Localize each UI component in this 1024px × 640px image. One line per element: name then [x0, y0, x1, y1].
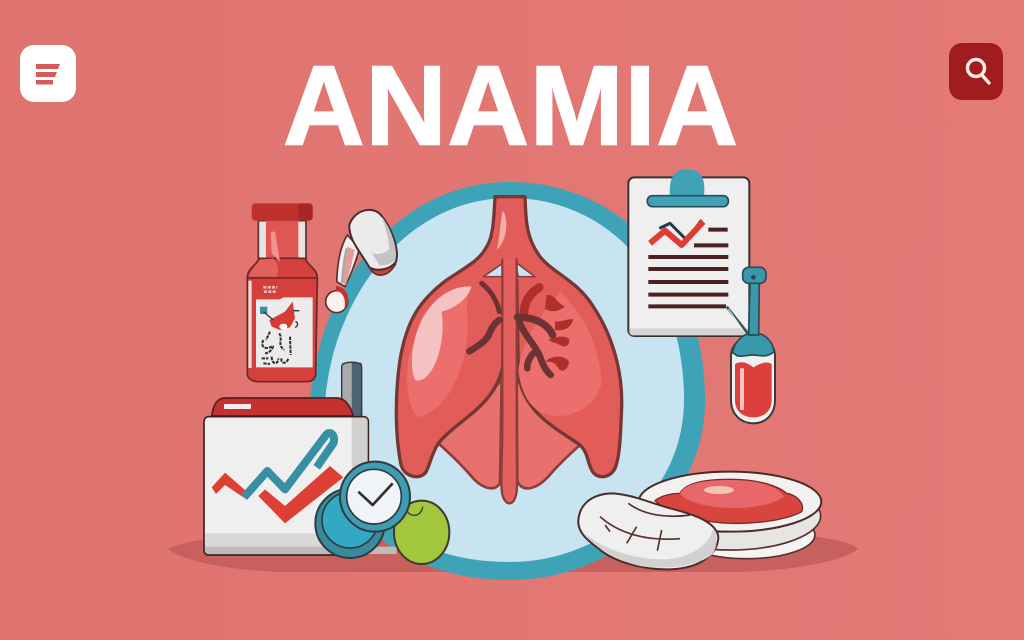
bottle cap	[252, 203, 313, 221]
clock badge	[340, 462, 410, 532]
apple	[394, 501, 449, 564]
blood	[735, 362, 772, 417]
trachea highlight	[497, 211, 506, 250]
background circle	[310, 182, 705, 580]
title: ANAMIA	[283, 42, 738, 168]
inhaler head	[369, 258, 396, 275]
top plate	[639, 472, 821, 532]
right red branches	[524, 287, 539, 313]
stethoscope badge and apple	[315, 462, 449, 564]
stitches	[600, 503, 690, 551]
ground shadow	[168, 534, 858, 572]
clip	[670, 169, 704, 196]
teal zigzag pen	[244, 433, 334, 497]
report text lines	[648, 230, 728, 306]
tube glass	[731, 335, 775, 423]
label art	[260, 307, 267, 314]
plates and pillow	[578, 472, 821, 569]
pillow	[578, 493, 718, 569]
tube stopper	[732, 333, 774, 356]
airway windows	[483, 262, 535, 277]
icon: search button	[949, 43, 1003, 100]
clipboard	[628, 169, 749, 336]
middle plate	[639, 482, 821, 550]
lighter right lobe area	[518, 292, 602, 416]
icon: menu button	[20, 45, 76, 102]
inhaler tube	[337, 235, 359, 287]
lower plate	[678, 511, 815, 559]
grey tube behind folder	[342, 362, 362, 420]
teal disc	[315, 489, 385, 558]
red zigzag	[212, 466, 343, 523]
inhaler ball	[326, 291, 348, 313]
blood test tube	[731, 267, 775, 423]
bottle label	[256, 297, 313, 367]
central bar	[501, 258, 517, 503]
label scribbles	[262, 332, 291, 364]
folder tab	[212, 398, 353, 416]
front lobes and trachea	[396, 197, 622, 477]
folder body	[204, 417, 368, 555]
bottle body	[247, 258, 317, 382]
report chart	[659, 220, 702, 240]
inhaler	[326, 210, 397, 313]
lungs illustration	[396, 197, 622, 503]
bottle neck	[258, 221, 306, 260]
small label marks	[263, 287, 277, 292]
sauce	[655, 479, 802, 523]
back lobes	[438, 380, 580, 488]
lighter left lobe area	[407, 290, 470, 417]
folder with chart	[204, 398, 397, 555]
bronchi	[482, 283, 499, 312]
bottle	[247, 203, 317, 382]
lung gloss	[412, 287, 472, 380]
stem	[749, 282, 759, 335]
clipboard paper	[628, 177, 749, 336]
